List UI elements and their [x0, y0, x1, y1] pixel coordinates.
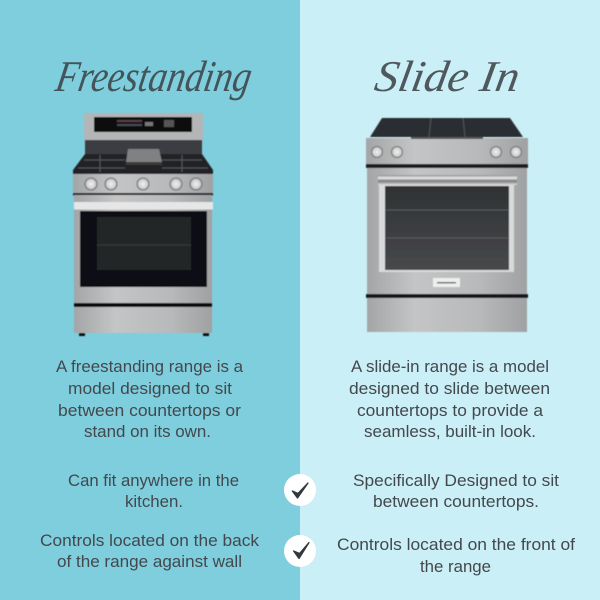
- heading: Slide In: Slide In: [371, 51, 524, 101]
- icon: check 2: [284, 535, 316, 567]
- text: freestanding controls: [40, 531, 260, 571]
- illustration: freestanding range: [73, 113, 213, 336]
- text: slide-in controls: [337, 535, 575, 576]
- illustration: slide-in range: [366, 118, 528, 332]
- text block: slide-in description: designed to slide between: [349, 379, 550, 398]
- icon: check 1: [284, 474, 316, 506]
- text block: slide-in description: seamless, built-in look.: [364, 422, 536, 441]
- panel: slide-in background: [300, 0, 600, 600]
- text block: freestanding description: between countertops or: [58, 401, 241, 420]
- panel: freestanding background: [0, 0, 300, 600]
- text: slide-in fit: [353, 471, 559, 511]
- text block: freestanding description: [56, 357, 244, 441]
- text: freestanding controls: of the range against wall: [57, 552, 242, 571]
- heading: Freestanding: Freestanding: [51, 51, 256, 101]
- text: slide-in controls: Controls located on the front of: [337, 535, 575, 554]
- text: slide-in controls: the range: [420, 557, 491, 576]
- text: slide-in fit: between countertops.: [373, 492, 539, 511]
- text block: freestanding description: A freestanding range is a: [56, 357, 244, 376]
- text: slide-in fit: Specifically Designed to sit: [353, 471, 559, 490]
- text: freestanding fit: [68, 471, 239, 511]
- text block: slide-in description: [349, 357, 550, 441]
- text: freestanding fit: Can fit anywhere in the: [68, 471, 239, 490]
- text block: freestanding description: model designed to sit: [68, 379, 232, 398]
- text block: slide-in description: countertops to provide a: [357, 401, 544, 420]
- text block: freestanding description: stand on its own.: [84, 422, 211, 441]
- text: freestanding fit: kitchen.: [125, 492, 183, 511]
- text: freestanding controls: Controls located on the back: [40, 531, 260, 550]
- text block: slide-in description: A slide-in range is a model: [351, 357, 549, 376]
